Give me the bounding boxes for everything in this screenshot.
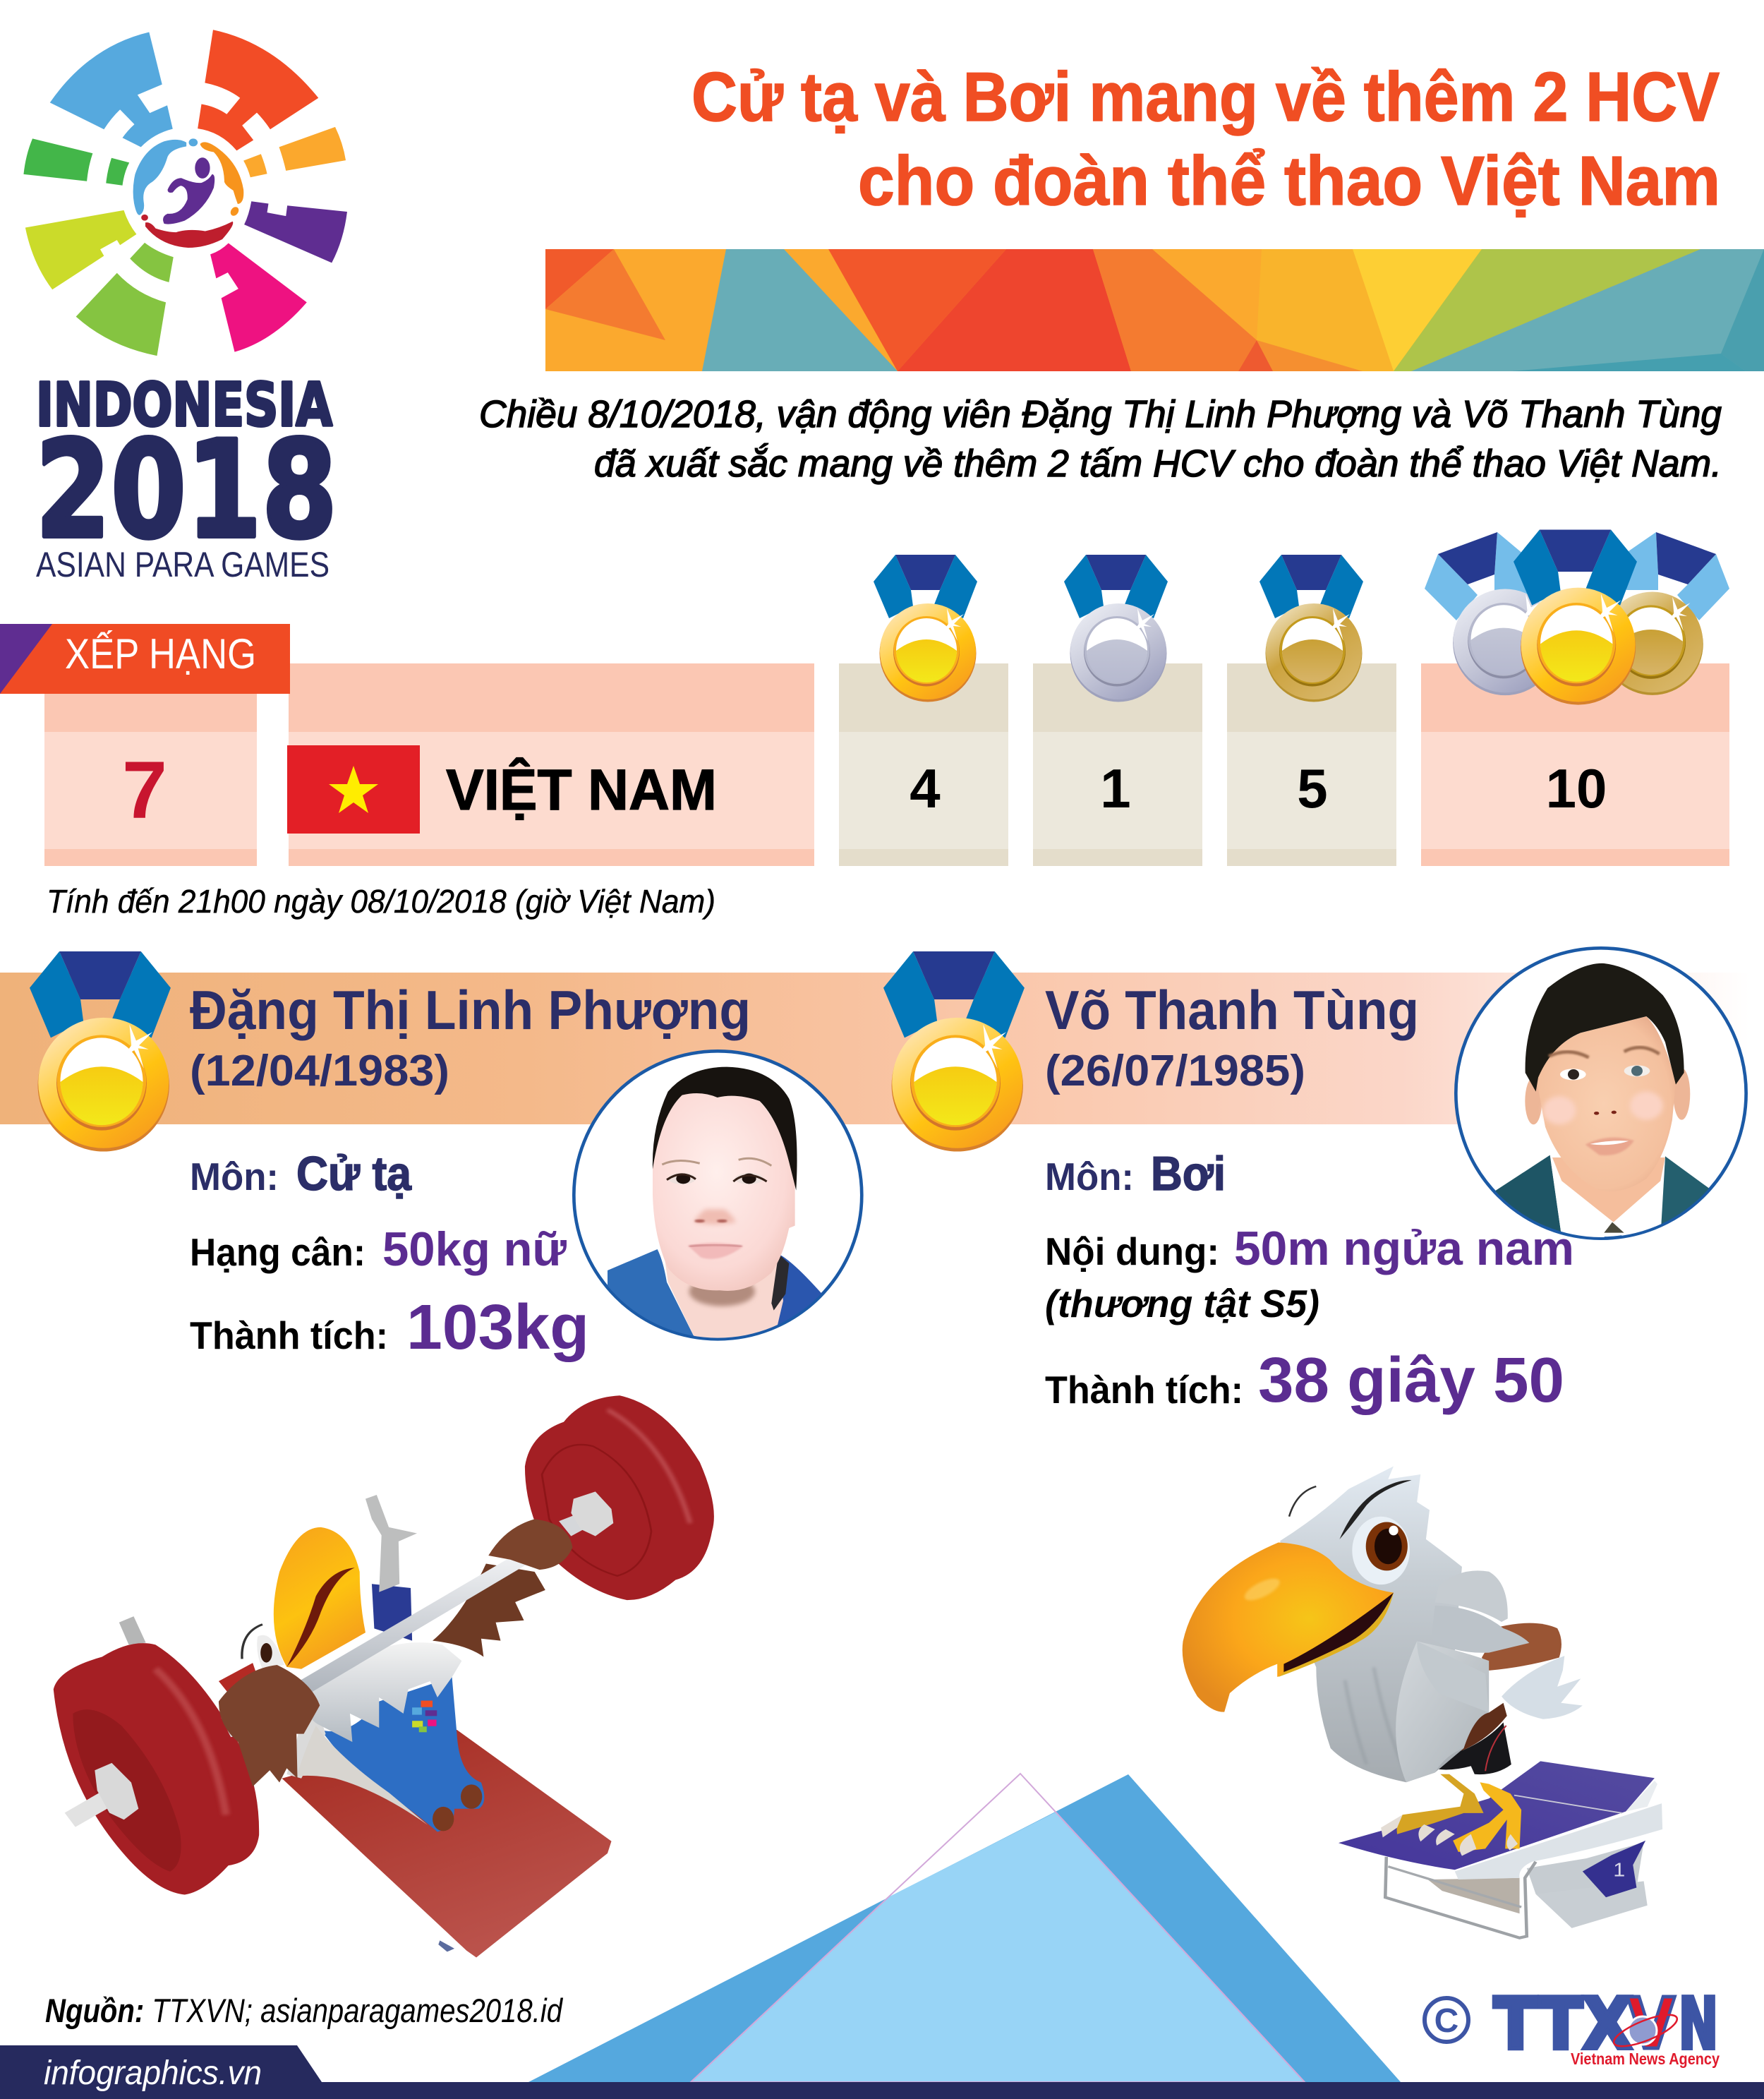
- mini emblem on jersey: [412, 1701, 437, 1732]
- mascot eye: [1352, 1517, 1410, 1584]
- logo wordmark 2018: 2018: [35, 412, 337, 568]
- TTXVN logo: [1425, 1983, 1720, 2068]
- ranking ribbon: XẾP HẠNG: [65, 630, 256, 678]
- rank column: [44, 692, 257, 866]
- globe and orbit: [1610, 2009, 1681, 2052]
- athlete 2 details: Nội dung:: [1045, 1229, 1219, 1273]
- mascot wing feathers: [1396, 1570, 1529, 1782]
- TTXVN logo: Vietnam News Agency: [1571, 2050, 1720, 2068]
- illustration: swimming eagle mascot: [1183, 1467, 1662, 1938]
- mascot right forearm: [433, 1564, 545, 1657]
- country column: [287, 663, 814, 866]
- mascot torso and shorts: [1439, 1703, 1507, 1758]
- icon: athlete 1 gold medal: [30, 951, 171, 1152]
- athlete 2 name: [1045, 979, 1419, 1095]
- logo emblem: [23, 30, 347, 356]
- mascot tail: [1502, 1656, 1583, 1719]
- athlete 2 name: Võ Thanh Tùng: [1045, 979, 1419, 1041]
- portrait: Vo Thanh Tung: [1456, 948, 1746, 1239]
- right weight plates: [525, 1395, 714, 1600]
- starting block: 1: [1613, 1860, 1625, 1881]
- TTXVN logo: N: [1679, 1983, 1718, 2065]
- icon: gold medal: [874, 555, 977, 702]
- athlete 1 details: 50kg nữ: [382, 1222, 567, 1276]
- title: cho đoàn thể thao Việt Nam: [858, 142, 1720, 219]
- intro text: [479, 393, 1722, 485]
- mascot body: [321, 1677, 484, 1832]
- athlete 2 details: Thành tích:: [1045, 1368, 1243, 1412]
- mascot arm: [1482, 1623, 1561, 1671]
- total column: 10: [1546, 757, 1607, 819]
- athlete 2 details: Môn:: [1045, 1155, 1134, 1198]
- timestamp note: Tính đến 21h00 ngày 08/10/2018 (giờ Việt Nam): [47, 883, 715, 920]
- ranking ribbon: [0, 624, 290, 694]
- background triangles: [528, 1774, 1401, 2082]
- illustration: weightlifting eagle mascot: [54, 1395, 714, 1957]
- mascot beak: [274, 1527, 366, 1669]
- copyright mark: [1425, 1998, 1468, 2042]
- athlete 1 details: Môn:: [190, 1155, 279, 1198]
- athlete 1 details: [190, 1147, 589, 1363]
- colour banner: [545, 249, 1764, 371]
- intro text: Chiều 8/10/2018, vận động viên Đặng Thị Linh Phượng và Võ Thanh Tùng: [479, 393, 1722, 435]
- starting block: [1339, 1761, 1662, 1938]
- gold column: [839, 663, 1008, 866]
- icon: three medals: [1425, 529, 1729, 705]
- stand: [372, 1584, 412, 1641]
- rank column: 7: [122, 745, 167, 836]
- athlete band: [0, 973, 1750, 1124]
- logo wordmark Asian Para Games: ASIAN PARA GAMES: [36, 545, 330, 584]
- portrait: Dang Thi Linh Phuong: [574, 1051, 862, 1341]
- bronze column: [1227, 663, 1396, 866]
- barbell bar: [299, 1548, 531, 1692]
- athlete 1 details: Thành tích:: [190, 1313, 388, 1357]
- TTXVN logo: V: [1627, 1983, 1675, 2065]
- footer bar: [0, 2045, 1764, 2099]
- silver column: [1033, 663, 1202, 866]
- left hand: [219, 1665, 320, 1786]
- silver column: 1: [1100, 757, 1131, 819]
- left weight plates: [54, 1643, 259, 1894]
- athlete 1 name: (12/04/1983): [190, 1047, 449, 1095]
- mascot legs and claws: [1381, 1774, 1521, 1856]
- icon: bronze medal: [1259, 555, 1363, 702]
- right hand: [488, 1519, 572, 1570]
- athlete 1 details: Cử tạ: [296, 1147, 412, 1201]
- gold column: 4: [910, 757, 941, 819]
- title: [691, 58, 1720, 219]
- bronze column: 5: [1297, 757, 1328, 819]
- athlete 2 details: 38 giây 50: [1258, 1345, 1564, 1416]
- country column: VIỆT NAM: [446, 758, 717, 822]
- source line: Nguồn: TTXVN; asianparagames2018.id: [45, 1992, 564, 2029]
- mascot eyebrows: [1289, 1480, 1412, 1539]
- athlete 1 name: Đặng Thị Linh Phượng: [190, 979, 751, 1041]
- total column: [1421, 663, 1729, 866]
- athlete 1 name: [190, 979, 751, 1095]
- lifting board: [282, 1730, 612, 1957]
- ranking table: [44, 663, 1729, 866]
- TTXVN logo: TTX: [1494, 1983, 1632, 2065]
- athlete 2 details: 50m ngửa nam: [1234, 1222, 1574, 1275]
- icon: silver medal: [1064, 555, 1168, 702]
- athlete 2 details: (thương tật S5): [1045, 1282, 1319, 1325]
- athlete 2 details: [1045, 1147, 1574, 1416]
- logo wordmark INDONESIA: INDONESIA: [36, 371, 332, 440]
- athlete 1 details: 103kg: [406, 1292, 589, 1363]
- mascot beak: [1183, 1542, 1394, 1712]
- athlete 1 details: Hạng cân:: [190, 1230, 366, 1274]
- footer bar: infographics.vn: [44, 2055, 262, 2092]
- icon: athlete 2 gold medal: [883, 951, 1025, 1152]
- logo: Indonesia 2018 Asian Para Games: [23, 30, 347, 584]
- copyright mark: C: [1434, 2002, 1458, 2040]
- mascot body and head: [1280, 1467, 1463, 1782]
- intro text: đã xuất sắc mang về thêm 2 tấm HCV cho đoàn thể thao Việt Nam.: [594, 443, 1722, 485]
- icon: Vietnam flag: [287, 745, 420, 834]
- athlete 2 details: Bơi: [1151, 1147, 1226, 1201]
- athlete 2 name: (26/07/1985): [1045, 1047, 1305, 1095]
